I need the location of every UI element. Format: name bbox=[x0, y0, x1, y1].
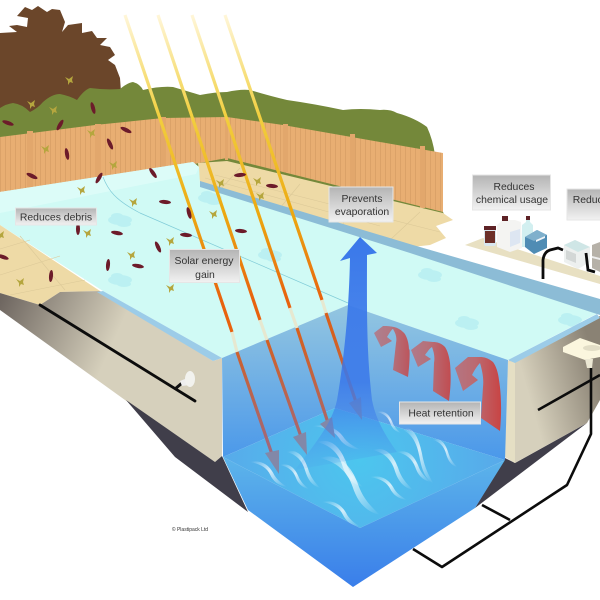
water: front slope bbox=[223, 457, 505, 587]
blue evaporation arrow bbox=[295, 237, 397, 470]
underside shadow right bbox=[475, 423, 587, 508]
label: prevents evaporation: evaporation bbox=[335, 207, 389, 218]
red arrow: heat 2 bbox=[411, 341, 451, 401]
red arrow: heat 1 bbox=[374, 326, 410, 377]
pool edge strip bbox=[200, 181, 600, 315]
paving: far side bbox=[198, 161, 453, 247]
label: reduces running costs bbox=[567, 189, 600, 220]
pipe and inlet bbox=[40, 305, 195, 401]
label: solar energy gain: Solar energy bbox=[175, 256, 234, 267]
label: reduces chemical usage: Reduces bbox=[493, 182, 535, 193]
ripples bbox=[250, 411, 457, 527]
ray arrowheads bbox=[265, 397, 362, 474]
paving: near side bbox=[0, 225, 100, 305]
hedge bbox=[0, 82, 435, 155]
water: floor bbox=[223, 408, 505, 528]
label: solar energy gain bbox=[170, 250, 240, 282]
right wall bbox=[505, 314, 600, 463]
red arrow: heat 3 bbox=[455, 357, 501, 431]
label: reduces chemical usage: chemical usage bbox=[476, 195, 548, 206]
solar rays bbox=[125, 15, 360, 466]
underside shadow left bbox=[126, 400, 248, 512]
label: reduces chemical usage bbox=[472, 175, 550, 210]
label: prevents evaporation bbox=[329, 187, 393, 222]
leaves bbox=[0, 76, 278, 293]
pump and filter bbox=[564, 240, 600, 272]
label: reduces debris bbox=[16, 208, 96, 225]
fence bbox=[0, 117, 446, 218]
label: heat retention bbox=[400, 402, 480, 424]
shelf bbox=[465, 238, 600, 284]
shelf pipes bbox=[543, 248, 595, 279]
left wall bbox=[0, 291, 222, 462]
copyright: © Plastipack Ltd bbox=[172, 526, 208, 533]
tree bbox=[0, 6, 121, 120]
label: prevents evaporation: Prevents bbox=[341, 194, 383, 205]
chemicals bbox=[484, 216, 547, 254]
label: heat retention: Heat retention bbox=[408, 408, 474, 420]
pool cover bbox=[0, 162, 600, 360]
water: back wall bbox=[222, 305, 508, 460]
skimmer bbox=[563, 338, 600, 368]
pipes right bbox=[413, 368, 600, 567]
label: reduces debris: Reduces debris bbox=[20, 212, 92, 224]
label: solar energy gain: gain bbox=[195, 270, 215, 281]
